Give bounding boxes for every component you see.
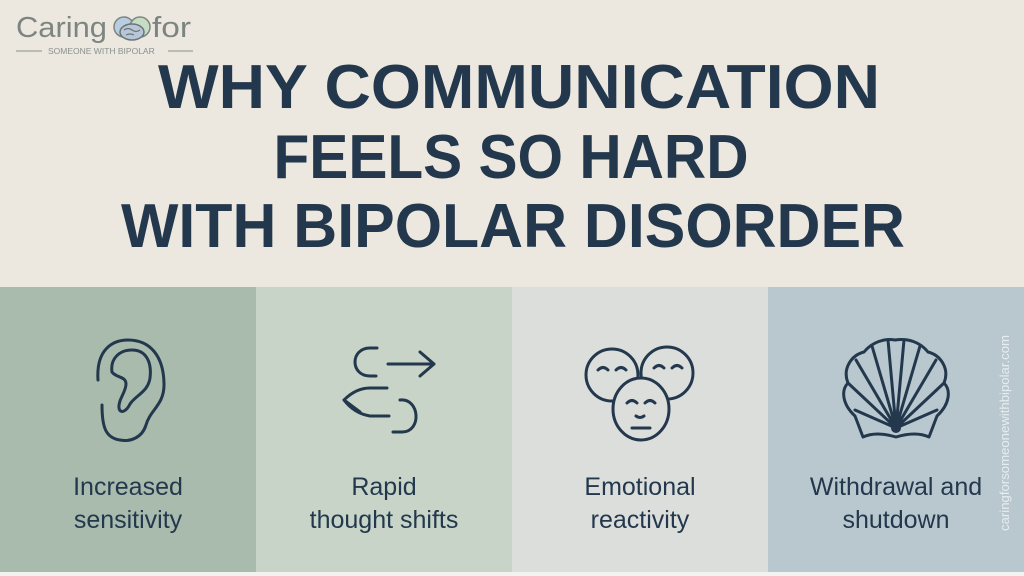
panel: increased sensitivity: sensitivity [74, 506, 183, 534]
logo: for [152, 12, 191, 44]
panel: rapid thought shifts: Rapid [351, 473, 417, 501]
title: FEELS SO HARD [274, 123, 748, 192]
panel: emotional reactivity: reactivity [591, 506, 690, 534]
icon: brain hearts [114, 17, 150, 40]
title: WITH BIPOLAR DISORDER [121, 192, 905, 261]
title: WHY COMMUNICATION [158, 53, 880, 122]
panel: emotional reactivity: Emotional [584, 473, 696, 501]
panel: withdrawal and shutdown [768, 287, 1024, 572]
logo [16, 12, 193, 56]
icon: shell [844, 340, 948, 437]
panel: withdrawal and shutdown: Withdrawal and [810, 473, 982, 501]
panel: rapid thought shifts: thought shifts [310, 506, 458, 534]
panel: rapid thought shifts [256, 287, 512, 572]
icon: ear [98, 340, 164, 440]
watermark: caringforsomeonewithbipolar.com [997, 335, 1012, 531]
panel: emotional reactivity [512, 287, 768, 572]
icon: faces [586, 347, 693, 440]
logo: Caring [16, 12, 107, 44]
panel: withdrawal and shutdown: shutdown [842, 506, 950, 534]
icon: arrows [344, 348, 434, 432]
panel: increased sensitivity [0, 287, 256, 572]
panel: increased sensitivity: Increased [73, 473, 183, 501]
logo: SOMEONE WITH BIPOLAR [48, 46, 155, 56]
title [121, 53, 905, 261]
